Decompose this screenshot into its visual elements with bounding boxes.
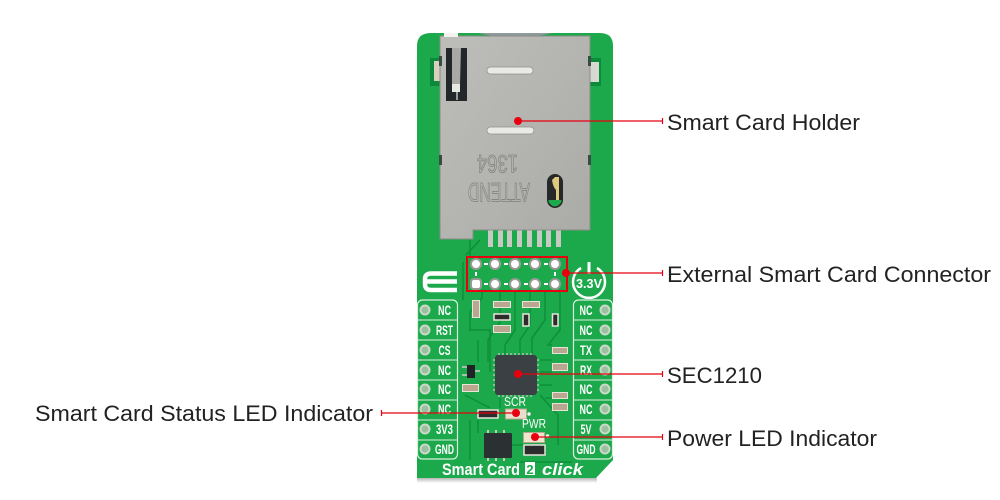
holder pins <box>488 230 561 247</box>
right pin header: NC <box>580 381 592 397</box>
connector links <box>475 263 556 285</box>
holder engraving <box>468 149 530 207</box>
left pin header: NC <box>438 401 451 417</box>
board name: 2 <box>526 462 534 477</box>
left pin header: GND <box>435 441 454 457</box>
right pin header: NC <box>580 302 592 318</box>
PWR LED <box>524 432 544 442</box>
callout: smart card status LED indicator <box>35 401 520 426</box>
smart card disc behind holder <box>478 33 552 38</box>
callout: external smart card connector <box>467 257 991 291</box>
left pin header: 3V3 <box>436 421 453 437</box>
callout: smart card holder: Smart Card Holder <box>667 110 860 135</box>
SEC1210 chip <box>493 353 539 397</box>
left pin header: RST <box>436 322 453 338</box>
holder slots <box>487 67 534 134</box>
holder engraving: ATTEND <box>468 177 530 207</box>
left pin header: CS <box>438 342 450 358</box>
holder switch <box>446 48 467 101</box>
side pads <box>430 58 601 86</box>
left pin header: NC <box>438 381 451 397</box>
callout: smart card status LED indicator: Smart Card Status LED Indicator <box>35 401 373 426</box>
board name: click <box>542 460 585 479</box>
right pin header: GND <box>576 441 596 457</box>
logo <box>425 274 457 290</box>
callout: smart card holder <box>514 110 860 135</box>
3.3V voltage badge: 3.3V <box>576 276 602 291</box>
left pin header: NC <box>438 362 451 378</box>
board name <box>442 460 585 479</box>
board name: Smart Card <box>442 460 520 479</box>
right pin header: 5V <box>580 421 592 437</box>
connector pads <box>471 259 560 289</box>
callout: external smart card connector: External Smart Card Connector <box>667 262 991 287</box>
smart card holder <box>439 33 591 239</box>
right pin header: TX <box>580 342 592 358</box>
right pin header: RX <box>580 362 592 378</box>
callout: power LED indicator <box>531 426 877 451</box>
SCR silk label: SCR <box>504 394 526 409</box>
left pin header <box>417 300 458 459</box>
passive components <box>462 300 568 455</box>
holder engraving: 1364 <box>477 149 518 177</box>
SCR LED <box>506 409 526 419</box>
PWR silk label: PWR <box>522 416 546 431</box>
right pin header: NC <box>580 401 592 417</box>
pcb outline <box>417 33 613 478</box>
callout: SEC1210 <box>514 363 762 388</box>
callout: SEC1210: SEC1210 <box>667 363 762 388</box>
holder oval window <box>547 174 563 208</box>
right pin header <box>573 300 613 459</box>
board <box>417 33 613 483</box>
callout: power LED indicator: Power LED Indicator <box>667 426 877 451</box>
right pin header: NC <box>580 322 592 338</box>
3.3V voltage badge <box>573 262 605 298</box>
transistor <box>462 365 480 378</box>
regulator chip <box>484 430 512 461</box>
left pin header: NC <box>438 302 451 318</box>
board shadow <box>417 478 597 483</box>
